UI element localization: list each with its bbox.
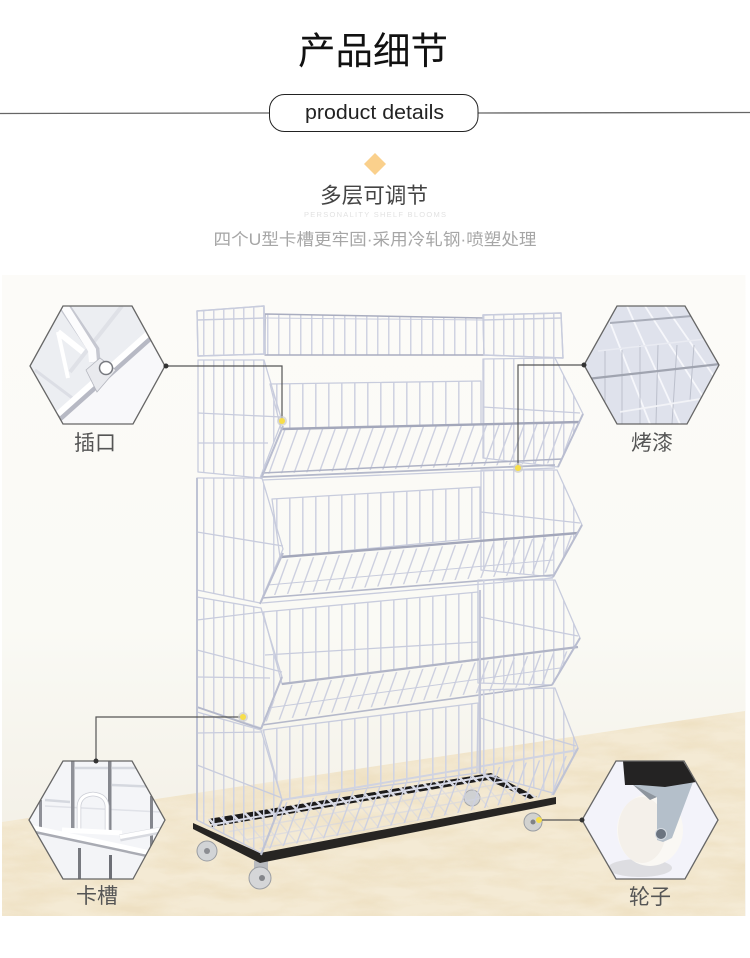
hexagon callout: 卡槽 bbox=[24, 759, 170, 908]
label: 轮子: 轮子 bbox=[629, 886, 671, 909]
basket tier 1 bbox=[198, 358, 583, 480]
header badge: product details: product details bbox=[305, 102, 444, 124]
connector: 轮子 bbox=[536, 817, 584, 823]
hexagon callout: 轮子 bbox=[580, 759, 720, 909]
icon: diamond bbox=[364, 153, 386, 175]
base frame and wheels bbox=[193, 773, 556, 889]
panel: product photo scene bbox=[2, 397, 746, 916]
basket tier 2 bbox=[197, 470, 582, 604]
connector: 插口 bbox=[164, 364, 287, 426]
title: 产品细节 bbox=[298, 30, 448, 72]
header badge: product details bbox=[0, 94, 750, 132]
hexagon callout: 烤漆 bbox=[582, 304, 722, 455]
hexagon callout: 插口 bbox=[28, 304, 170, 455]
connector: 烤漆 bbox=[513, 362, 586, 473]
basket tier 4 bbox=[197, 478, 578, 855]
section heading: 多层可调节 bbox=[320, 184, 428, 208]
top header basket bbox=[197, 306, 563, 358]
section subheading english: PERSONALITY SHELF BLOOMS bbox=[304, 210, 446, 219]
basket tier 3 bbox=[197, 580, 580, 729]
label: 插口: 插口 bbox=[74, 432, 116, 455]
connector: 卡槽 bbox=[94, 712, 248, 764]
section description: 四个U型卡槽更牢固·采用冷轧钢·喷塑处理 bbox=[214, 230, 536, 249]
label: 卡槽: 卡槽 bbox=[76, 885, 118, 908]
wheels bbox=[197, 790, 542, 889]
wire rack bbox=[193, 306, 583, 889]
label: 烤漆: 烤漆 bbox=[631, 432, 673, 455]
black base frame bbox=[193, 797, 556, 863]
